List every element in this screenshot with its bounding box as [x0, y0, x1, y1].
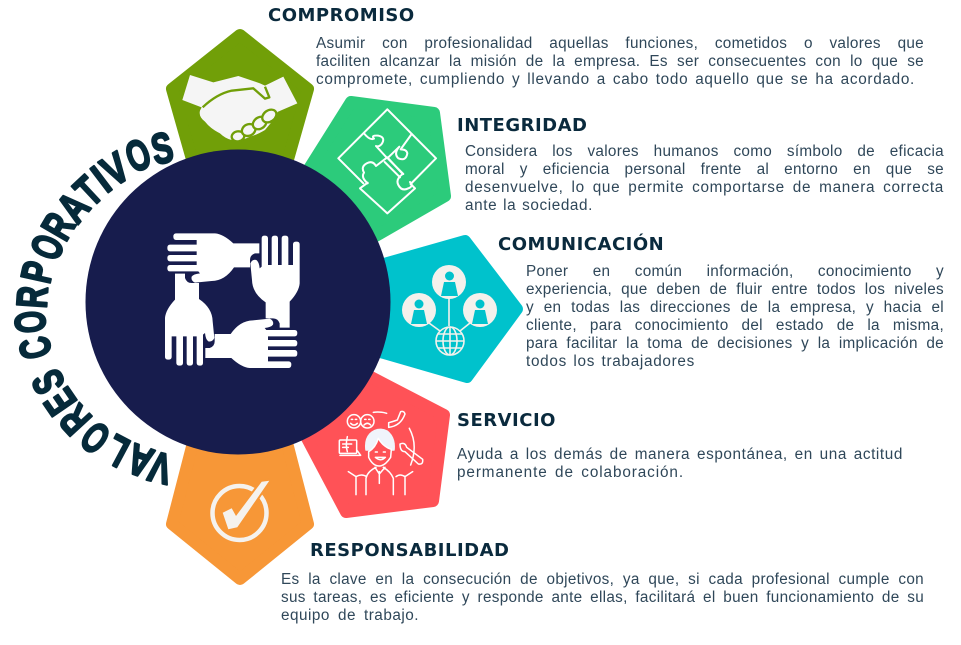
text: integridad: Considera los valores humanos como símbolo de eficacia	[465, 143, 944, 160]
curved title: S	[22, 362, 74, 402]
text: comunicacion: cliente, para conocimiento del estado de la misma,	[526, 317, 944, 334]
curved title: P	[11, 257, 63, 287]
text: compromiso: compromete, cumpliendo y llevando a cabo todo aquello que se ha acordado.	[316, 71, 915, 88]
curved title: O	[5, 309, 55, 335]
curved title: L	[97, 425, 137, 477]
text: responsabilidad: equipo de trabajo.	[281, 607, 419, 624]
icon: customer service person	[339, 411, 423, 495]
curved title: A	[48, 184, 100, 232]
curved title: R	[7, 284, 57, 309]
text: responsabilidad	[281, 571, 924, 624]
text: responsabilidad: sus tareas, es eficiente y responde ante ellas, facilitará el buen funcionamiento de su	[281, 589, 924, 606]
text: servicio	[457, 446, 903, 481]
curved title: O	[21, 228, 74, 266]
central circle	[86, 150, 390, 454]
pentagon: comunicacion	[370, 241, 517, 377]
curved title: O	[72, 412, 119, 464]
text: integridad: desenvuelve, lo que permite comportarse de manera correcta	[465, 179, 944, 196]
curved title: A	[121, 433, 160, 487]
text: comunicacion: para facilitar la toma de decisiones y la implicación de	[526, 335, 944, 352]
heading: compromiso: COMPROMISO	[268, 5, 415, 26]
icon: four joined hands	[165, 233, 300, 368]
text: responsabilidad: Es la clave en la consecución de objetivos, ya que, si cada profesional cumple con	[281, 571, 924, 588]
text: servicio: permanente de colaboración.	[457, 464, 684, 481]
pentagon: responsabilidad	[172, 435, 308, 579]
icon: puzzle	[338, 109, 436, 213]
curved title: S	[147, 122, 177, 174]
text: comunicacion: experiencia, que deben de fluir entre todos los niveles	[526, 281, 944, 298]
text: servicio: Ayuda a los demás de manera espontánea, en una actitud	[457, 446, 903, 463]
heading: responsabilidad: RESPONSABILIDAD	[310, 540, 509, 561]
pentagon: servicio	[300, 361, 444, 512]
text: integridad	[465, 143, 944, 214]
icon: handshake	[182, 75, 297, 142]
text: compromiso: Asumir con profesionalidad aquellas funciones, cometidos o valores que	[316, 35, 924, 52]
text: comunicacion: Poner en común información, conocimiento y	[526, 263, 944, 280]
heading: comunicacion: COMUNICACIÓN	[498, 234, 664, 255]
text: comunicacion: y en todas las direcciones de la empresa, y hacia el	[526, 299, 944, 316]
curved title: R	[50, 395, 100, 445]
heading: servicio: SERVICIO	[457, 410, 556, 431]
curved title: V	[144, 441, 176, 493]
curved title	[5, 122, 177, 493]
text: compromiso	[316, 35, 924, 88]
pentagon: compromiso	[172, 35, 308, 170]
pentagon: integridad	[290, 102, 445, 245]
curved title: O	[119, 129, 157, 182]
text: compromiso: faciliten alcanzar la misión de la empresa. Es ser consecuentes con lo que se	[316, 53, 924, 70]
text: comunicacion: todos los trabajadores	[526, 353, 695, 370]
icon: people network	[402, 265, 497, 355]
curved title: V	[93, 144, 138, 196]
curved title: C	[10, 332, 61, 364]
curved title: R	[31, 204, 85, 248]
curved title: E	[34, 380, 86, 424]
text: integridad: moral y eficiencia personal frente al entorno en que se	[465, 161, 944, 178]
text: integridad: ante la sociedad.	[465, 197, 593, 214]
curved title: I	[84, 158, 120, 202]
curved title: T	[65, 167, 111, 215]
text: comunicacion	[526, 263, 944, 370]
heading: integridad: INTEGRIDAD	[457, 115, 587, 136]
icon: check mark	[212, 481, 269, 540]
